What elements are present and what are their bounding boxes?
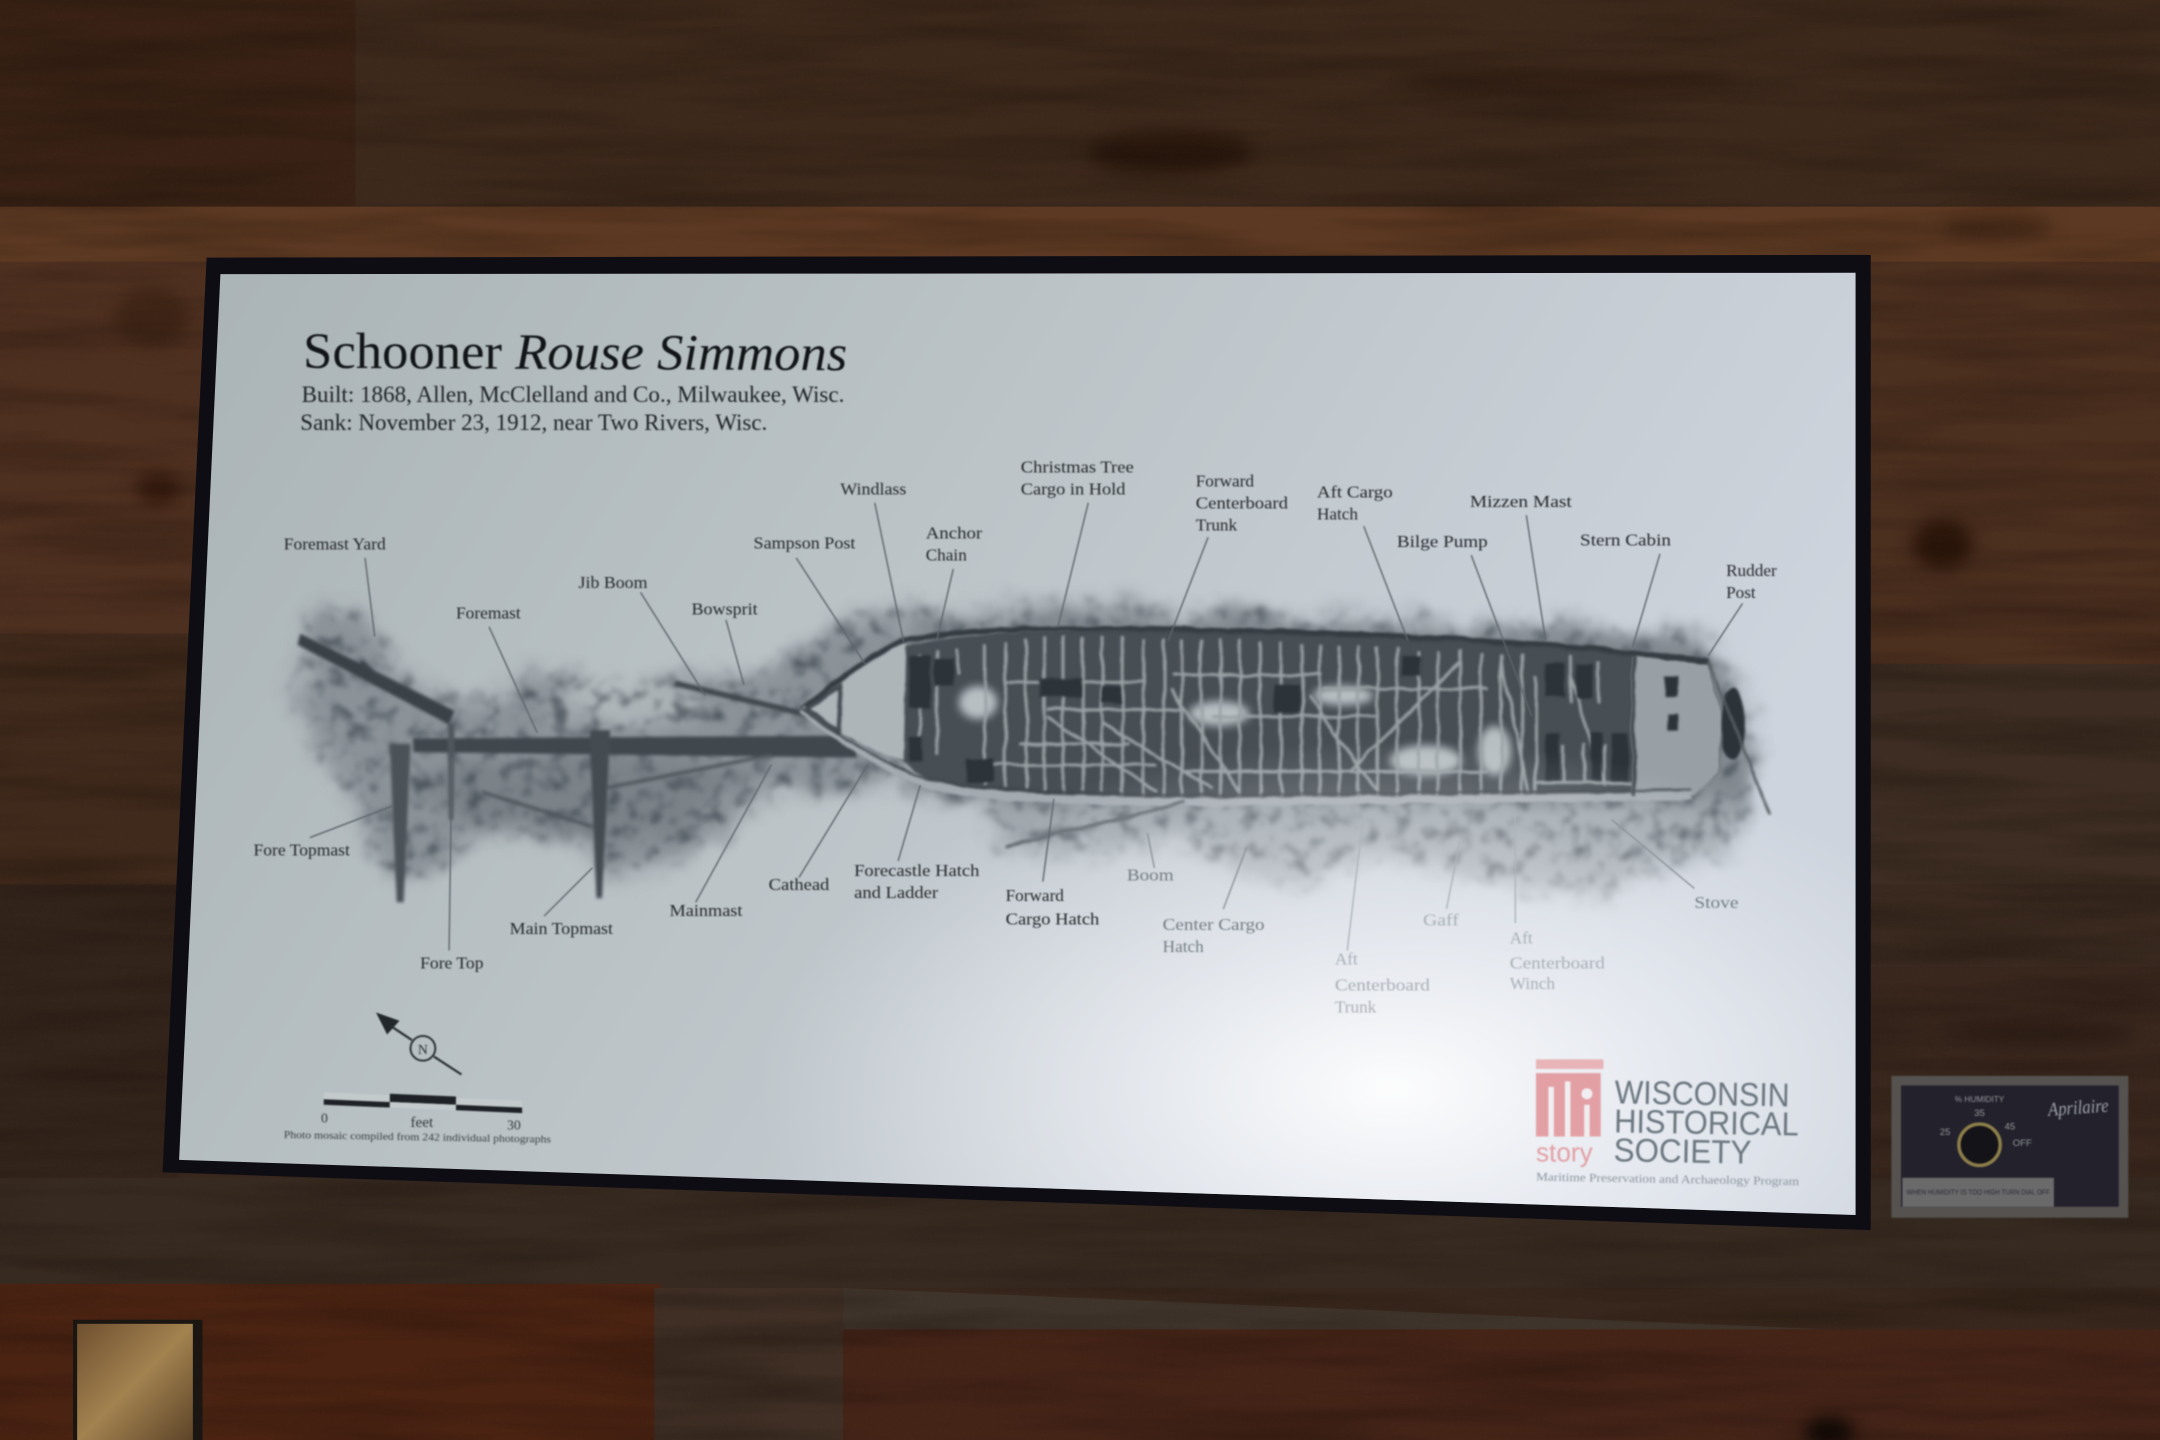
ship part labels: Mizzen Mast xyxy=(1470,492,1572,511)
program line: Maritime Preservation and Archaeology Program xyxy=(1536,1171,1799,1188)
ship part labels: Cargo in Hold xyxy=(1021,480,1126,499)
ship part labels: Trunk xyxy=(1196,515,1238,534)
brass wall plate xyxy=(73,1320,203,1440)
ship part labels: Christmas Tree xyxy=(1021,458,1134,477)
ship part labels: Centerboard xyxy=(1335,975,1430,994)
ship part labels: Centerboard xyxy=(1196,493,1288,512)
ship part labels: Windlass xyxy=(840,480,907,499)
humidistat control plate: WHEN HUMIDITY IS TOO HIGH TURN DIAL OFF xyxy=(1907,1187,2050,1196)
society name: SOCIETY xyxy=(1613,1132,1752,1172)
ship part labels: Bilge Pump xyxy=(1397,532,1488,551)
white sign board xyxy=(179,273,1856,1215)
shipwreck photo mosaic xyxy=(298,606,1770,902)
scale bar xyxy=(321,1092,522,1133)
black sign frame xyxy=(163,255,1871,1230)
humidistat control plate: 35 xyxy=(1974,1108,1985,1119)
ship part labels: Stove xyxy=(1694,893,1739,912)
humidistat control plate: OFF xyxy=(2013,1138,2032,1149)
ship part labels xyxy=(253,458,1777,1017)
icon: north arrow xyxy=(376,1013,461,1074)
ship part labels: Anchor xyxy=(926,524,982,543)
ship part labels: Stern Cabin xyxy=(1580,531,1671,550)
bow section xyxy=(802,641,906,760)
humidistat control plate xyxy=(1891,1076,2128,1218)
scale bar: 30 xyxy=(507,1118,521,1133)
light glare on the board xyxy=(179,273,1856,1215)
leader lines xyxy=(310,503,1743,951)
masts and spars xyxy=(298,634,857,902)
ship part labels: Forecastle Hatch xyxy=(854,861,980,880)
ship part labels: Cargo Hatch xyxy=(1006,909,1100,928)
ship part labels: Gaff xyxy=(1423,911,1459,930)
ship part labels: Hatch xyxy=(1163,937,1204,956)
ship part labels: Post xyxy=(1726,583,1756,602)
humidistat control plate: 45 xyxy=(2004,1122,2015,1133)
ship part labels: Foremast Yard xyxy=(284,535,386,554)
society name: HISTORICAL xyxy=(1614,1103,1799,1144)
build details: Built: 1868, Allen, McClelland and Co., Milwaukee, Wisc. xyxy=(302,382,844,407)
ship part labels: Winch xyxy=(1510,974,1555,993)
debris field around the bow xyxy=(298,606,909,882)
debris field around the hull xyxy=(909,606,1752,895)
icon: red logo mark xyxy=(1536,1059,1603,1167)
ship part labels: Trunk xyxy=(1335,998,1377,1017)
ship part labels: and Ladder xyxy=(854,883,938,902)
humidistat control plate: 25 xyxy=(1940,1127,1950,1138)
ship part labels: Fore Top xyxy=(420,953,484,972)
ship part labels: Centerboard xyxy=(1510,953,1605,972)
ship part labels: Rudder xyxy=(1726,561,1777,580)
ship part labels: Sampson Post xyxy=(754,533,856,552)
sinking details: Sank: November 23, 1912, near Two Rivers, Wisc. xyxy=(300,410,767,435)
society name xyxy=(1613,1074,1800,1172)
humidistat control plate: Aprilaire xyxy=(2046,1096,2110,1121)
heading: Schooner Rouse Simmons xyxy=(303,324,847,382)
ship part labels: Aft xyxy=(1510,929,1533,948)
ship part labels: Forward xyxy=(1006,886,1064,905)
ship part labels: Fore Topmast xyxy=(253,840,350,859)
ship part labels: Aft xyxy=(1335,949,1358,968)
ship part labels: Mainmast xyxy=(669,901,743,920)
ship part labels: Aft Cargo xyxy=(1317,482,1393,501)
icon: north arrow: N xyxy=(418,1042,428,1057)
scale bar: feet xyxy=(411,1114,434,1131)
control knob xyxy=(1959,1124,2000,1165)
ship part labels: Center Cargo xyxy=(1163,915,1265,934)
title block xyxy=(300,324,847,435)
ship part labels: Cathead xyxy=(769,875,830,894)
ship part labels: Bowsprit xyxy=(692,599,758,618)
hull outline and gunwales xyxy=(802,628,1770,847)
ship part labels: Forward xyxy=(1196,471,1254,490)
dark cells in hull xyxy=(909,656,1745,782)
ship part labels: Hatch xyxy=(1317,504,1358,523)
logo: Wisconsin Historical Society xyxy=(1536,1059,1800,1188)
scale bar: 0 xyxy=(321,1111,328,1126)
ship part labels: Boom xyxy=(1127,865,1174,884)
ship part labels: Main Topmast xyxy=(510,919,613,938)
icon: red logo mark: story xyxy=(1536,1137,1594,1167)
hull interior xyxy=(898,629,1722,802)
hull timbers xyxy=(920,636,1634,796)
stern section xyxy=(1634,654,1722,799)
humidistat control plate: % HUMIDITY xyxy=(1955,1095,2005,1104)
ship part labels: Foremast xyxy=(456,604,521,623)
society name: WISCONSIN xyxy=(1614,1074,1790,1114)
photo credit: Photo mosaic compiled from 242 individual photographs xyxy=(284,1130,551,1146)
ship part labels: Jib Boom xyxy=(579,573,648,592)
light interior patches xyxy=(959,686,1511,776)
ship part labels: Chain xyxy=(926,546,967,565)
